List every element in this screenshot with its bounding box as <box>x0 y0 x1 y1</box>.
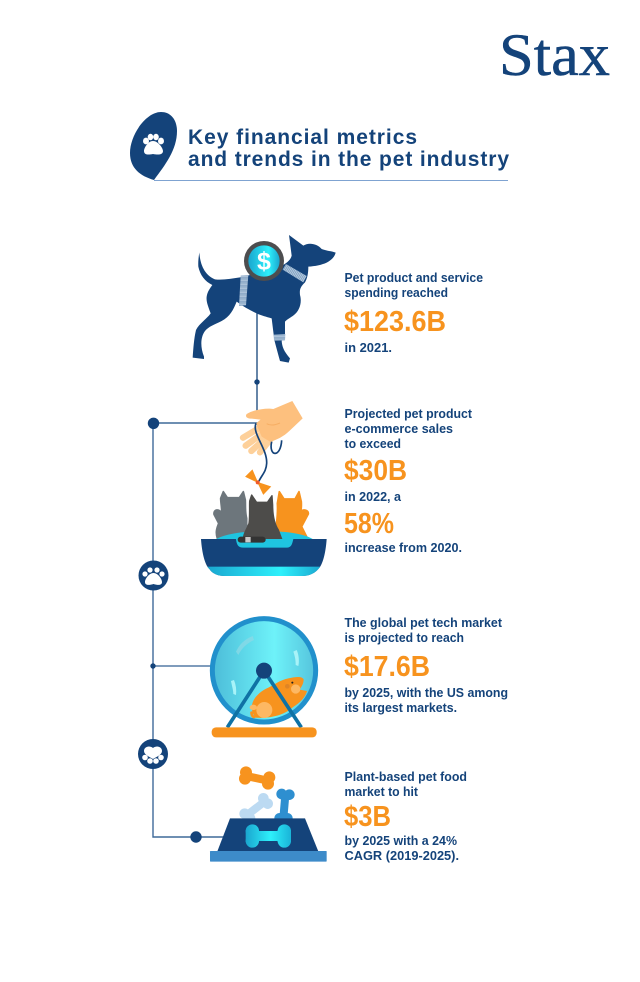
bed <box>201 539 327 577</box>
icon: paw badge 1 <box>138 560 168 590</box>
text block: pet spending: $123.6B <box>344 306 446 338</box>
text block: e-commerce sales: to exceed <box>344 436 401 451</box>
text block: plant-based food: CAGR (2019-2025). <box>344 848 459 863</box>
bowl <box>217 818 318 851</box>
illustration: bones and food bowl <box>210 766 327 862</box>
bow toy <box>246 470 271 494</box>
text block: e-commerce sales: in 2022, a <box>344 489 402 504</box>
text block: pet spending: spending reached <box>344 285 448 300</box>
icon: teardrop with paw <box>130 112 177 180</box>
stand <box>227 671 301 727</box>
text block: plant-based food: $3B <box>344 801 391 833</box>
cat tail <box>238 537 266 543</box>
text block: plant-based food: by 2025 with a 24% <box>344 833 458 848</box>
base <box>212 727 317 737</box>
header group <box>130 112 509 180</box>
text block: plant-based food: market to hit <box>344 784 419 799</box>
illustration: dog with dollar coin <box>193 235 336 363</box>
blue bone <box>274 789 295 824</box>
text block: e-commerce sales <box>344 406 473 555</box>
text block: pet tech: by 2025, with the US among <box>344 685 508 700</box>
orange cat <box>276 492 308 537</box>
text block: pet tech: its largest markets. <box>344 700 457 715</box>
hand <box>243 401 303 452</box>
text block: plant-based food: Plant-based pet food <box>344 769 467 784</box>
wheel <box>212 619 316 722</box>
text block: pet tech <box>344 615 508 715</box>
text block: pet spending: in 2021. <box>344 340 392 355</box>
text block: pet tech: is projected to reach <box>344 630 464 645</box>
text block: e-commerce sales: Projected pet product <box>344 406 473 421</box>
illustration: hamster wheel <box>212 619 317 737</box>
icon: paw badge 2 <box>138 739 168 769</box>
text block: e-commerce sales: increase from 2020. <box>344 540 462 555</box>
cushion <box>216 531 313 539</box>
cyan bone <box>246 824 291 848</box>
icon: dollar coin <box>244 241 284 281</box>
icon: dollar coin: $ <box>257 248 271 276</box>
logo: Stax: Stax <box>499 22 610 88</box>
hamster <box>250 677 307 718</box>
text block: pet tech: The global pet tech market <box>344 615 503 630</box>
dark cat <box>243 495 282 539</box>
leash <box>255 423 282 482</box>
title: and trends in the pet industry <box>188 148 509 171</box>
text block: e-commerce sales: 58% <box>344 508 394 540</box>
light blue bone <box>239 793 273 824</box>
grey cat <box>214 492 247 538</box>
timeline connectors <box>148 313 264 843</box>
title <box>188 126 509 171</box>
text block: plant-based food <box>344 769 467 863</box>
illustration: hand, leash and cats in bed <box>201 401 327 577</box>
text block: pet spending <box>344 270 483 355</box>
dog silhouette <box>193 235 336 363</box>
text block: e-commerce sales: e-commerce sales <box>344 421 453 436</box>
text block: e-commerce sales: $30B <box>344 455 407 487</box>
text block: pet spending: Pet product and service <box>344 270 483 285</box>
title: Key financial metrics <box>188 126 417 149</box>
orange bone <box>239 766 275 790</box>
text block: pet tech: $17.6B <box>344 651 430 683</box>
